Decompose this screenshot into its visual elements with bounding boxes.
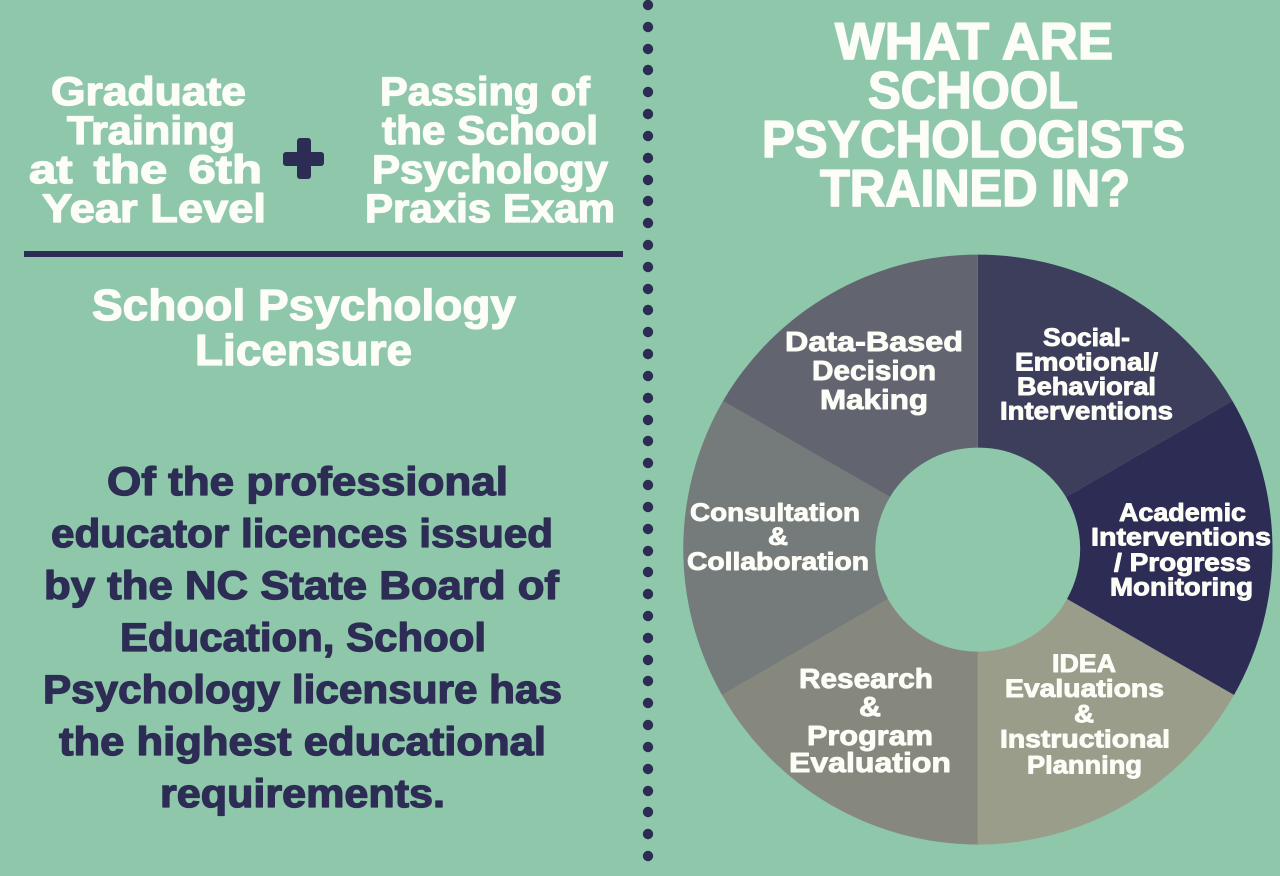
- label: data-based decision making: Making: [820, 384, 928, 415]
- label: data-based decision making: Data-Based: [785, 326, 963, 357]
- text block: praxis exam: Psychology: [372, 148, 609, 192]
- text block: educational requirements statement: requirements.: [160, 772, 445, 816]
- text block: educational requirements statement: Of the professional: [107, 460, 508, 504]
- label: consultation and collaboration: Consultation: [690, 499, 860, 527]
- segment: social-emotional: [978, 255, 1232, 550]
- title: TRAINED IN?: [820, 160, 1130, 218]
- icon: plus sign: [283, 138, 324, 179]
- text block: praxis exam: Passing of: [380, 70, 591, 114]
- title: WHAT ARE: [835, 13, 1113, 71]
- label: IDEA evaluations and instructional planning: Planning: [1027, 752, 1142, 780]
- text block: graduate training: Graduate: [51, 70, 246, 114]
- title: SCHOOL: [868, 62, 1078, 120]
- label: IDEA evaluations and instructional planning: [1000, 650, 1170, 780]
- label: research and program evaluation: [789, 663, 951, 778]
- label: social-emotional interventions: Interventions: [1000, 398, 1173, 426]
- label: social-emotional interventions: Behavioral: [1017, 373, 1156, 401]
- label: consultation and collaboration: [687, 499, 869, 576]
- segment: consultation: [683, 401, 890, 695]
- label: research and program evaluation: Program: [807, 720, 933, 751]
- text block: educational requirements statement: by the NC State Board of: [44, 564, 560, 608]
- label: research and program evaluation: Research: [799, 663, 933, 694]
- text block: graduate training: [29, 70, 266, 231]
- text block: graduate training: at the 6th: [29, 148, 262, 192]
- heading: school psychology licensure: [92, 281, 517, 375]
- label: data-based decision making: Decision: [812, 355, 936, 386]
- label: IDEA evaluations and instructional planning: Evaluations: [1005, 675, 1164, 703]
- label: consultation and collaboration: Collaboration: [687, 548, 869, 576]
- title: [762, 13, 1185, 218]
- text block: graduate training: Training: [67, 109, 235, 153]
- label: academic interventions: / Progress: [1114, 549, 1251, 577]
- segment: IDEA evaluations: [978, 599, 1234, 845]
- text block: praxis exam: [365, 70, 615, 231]
- label: social-emotional interventions: Social-: [1043, 324, 1130, 352]
- label: IDEA evaluations and instructional planning: Instructional: [1000, 726, 1170, 754]
- text block: educational requirements statement: educator licences issued: [51, 512, 553, 556]
- title: PSYCHOLOGISTS: [762, 111, 1185, 169]
- segment: research: [722, 599, 978, 845]
- label: social-emotional interventions: [1000, 324, 1173, 426]
- heading: school psychology licensure: Licensure: [195, 326, 412, 375]
- horizontal rule: [24, 251, 623, 257]
- label: academic interventions: Academic: [1119, 499, 1246, 527]
- text block: praxis exam: the School: [382, 109, 598, 153]
- label: academic interventions: Monitoring: [1110, 574, 1253, 602]
- text block: graduate training: Year Level: [42, 187, 266, 231]
- dotted vertical divider: [643, 0, 653, 861]
- text block: educational requirements statement: the highest educational: [59, 720, 546, 764]
- label: IDEA evaluations and instructional planning: &: [1074, 700, 1094, 728]
- label: academic interventions: Interventions: [1091, 524, 1271, 552]
- label: social-emotional interventions: Emotional/: [1015, 348, 1158, 376]
- label: IDEA evaluations and instructional planning: IDEA: [1052, 650, 1116, 678]
- label: research and program evaluation: Evaluation: [789, 747, 951, 778]
- segment: data-based: [723, 255, 978, 497]
- label: research and program evaluation: &: [859, 691, 881, 722]
- text block: educational requirements statement: Psychology licensure has: [43, 668, 562, 712]
- text block: educational requirements statement: Education, School: [120, 616, 486, 660]
- heading: school psychology licensure: School Psychology: [92, 281, 517, 330]
- segment: academic: [1066, 401, 1272, 695]
- text block: praxis exam: Praxis Exam: [365, 187, 615, 231]
- label: consultation and collaboration: &: [768, 523, 788, 551]
- text block: educational requirements statement: [43, 460, 562, 816]
- donut chart: training areas: [683, 255, 1272, 845]
- label: academic interventions: [1091, 499, 1271, 602]
- label: data-based decision making: [785, 326, 963, 415]
